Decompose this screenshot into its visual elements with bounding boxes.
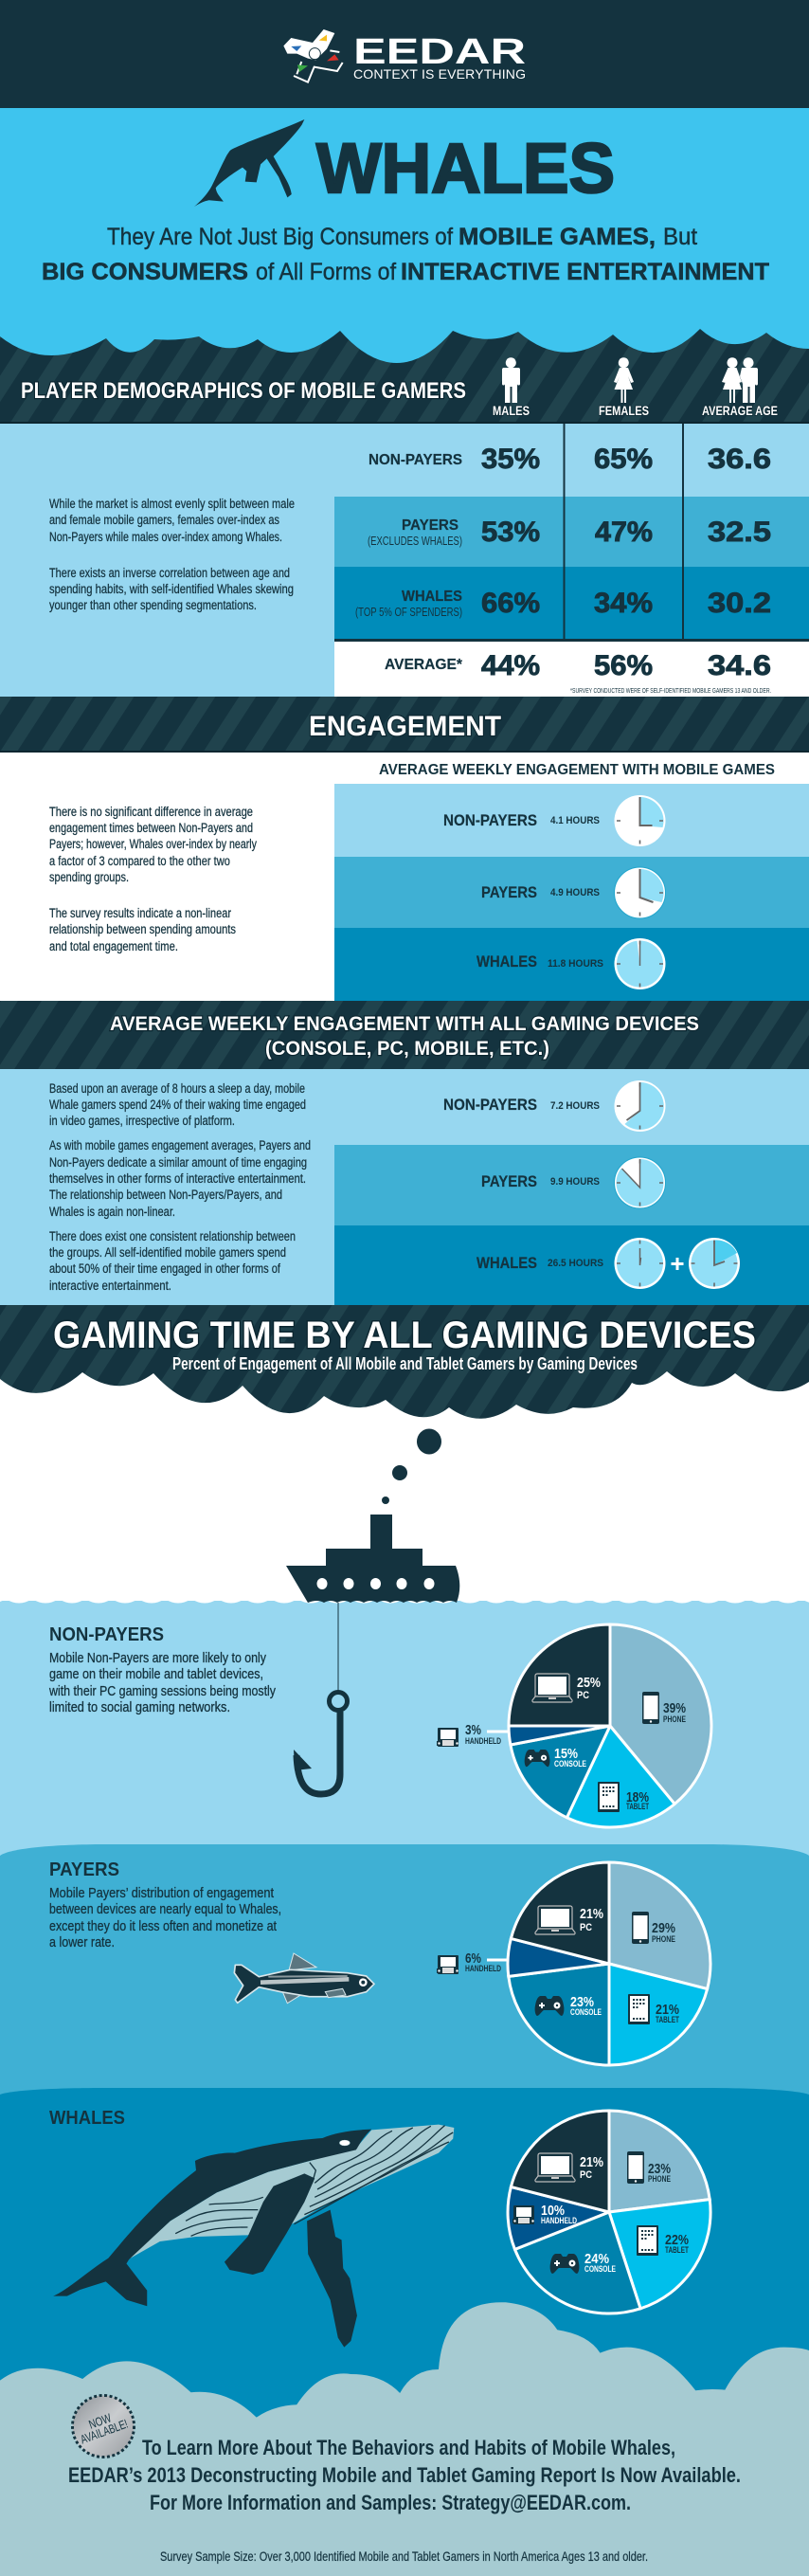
call to action text: To Learn More About The Behaviors and Habits of Mobile Whales, [142,2436,675,2459]
subtitle: of All Forms of [256,259,396,285]
subtitle: They Are Not Just Big Consumers of [107,224,453,250]
clock: 4.9 hours [614,867,665,918]
hero panel [0,108,809,383]
engagement text: a factor of 3 compared to the other two [49,854,230,868]
slice: tablet 22%: 22% [665,2232,689,2248]
slice: handheld 10%: 10% [541,2203,565,2219]
text block: themselves in other forms of interactive entertainment. [49,1171,306,1186]
slice: console 24%: CONSOLE [584,2264,616,2275]
icon: smoke bubbles [382,1429,441,1504]
text block: Mobile Payers’ distribution of engagement [49,1885,275,1901]
badge: now available: NOW [87,2410,114,2432]
icon: ship [286,1515,459,1603]
slice: handheld 3%: HANDHELD [465,1736,501,1747]
slice: phone 23%: PHONE [648,2174,671,2185]
slice: console 15% [525,1746,586,1769]
icon: fish [234,1953,374,2004]
row labels: WHALES [476,952,537,971]
text block: Whales is again non-linear. [49,1205,175,1219]
slice: PC 25%: PC [577,1690,589,1701]
slice: phone 29% [632,1912,675,1945]
water [0,2088,809,2502]
text block: limited to social gaming networks. [49,1699,230,1715]
panel: gaming time by device [0,1305,809,1419]
engagement text [49,805,257,953]
slice: tablet 21% [628,1994,679,2025]
text block: Mobile Non-Payers are more likely to only [49,1650,266,1666]
subtitle [42,224,769,285]
row labels: 11.8 HOURS [548,958,603,970]
demographics header band with wave top [0,329,809,423]
row labels: 4.1 HOURS [550,815,600,826]
panel: engagement [0,697,809,1001]
engagement band [0,697,809,752]
icon: fishing hook [294,1603,347,1794]
slice: tablet 18%: TABLET [626,1802,649,1812]
subtitle: MOBILE GAMES, [458,224,656,250]
panel: non-payers ocean [0,1429,809,1857]
panel rows [0,1069,809,1305]
badge: now available [72,2396,135,2457]
cloud [0,2302,809,2576]
subtitle: But [663,224,697,250]
header band [0,0,809,108]
slice: phone 23% [627,2151,671,2185]
slice: handheld 6% [437,1950,501,1974]
slice: PC 21% [535,2153,603,2182]
slice: phone 39%: PHONE [663,1714,686,1725]
title: WHALES [316,129,615,208]
panel: player demographics [0,329,809,697]
heading: WHALES [49,2108,125,2129]
heading: GAMING TIME BY ALL GAMING DEVICES [53,1315,756,1356]
slice: PC 25%: 25% [577,1675,601,1691]
slice: handheld 6%: HANDHELD [465,1964,501,1974]
column labels: AVERAGE AGE [702,403,778,418]
table backgrounds [0,424,809,697]
text block [48,1650,276,1715]
row: average: 34.6 [708,650,771,681]
row: payers: 47% [595,517,653,548]
row labels: PAYERS [481,883,537,901]
clock: 26.5 hours, second [689,1238,740,1289]
plus sign [671,1258,684,1270]
slice: handheld 3%: 3% [465,1722,481,1738]
row: non-payers: 65% [594,444,653,475]
row: average: 44% [481,650,540,681]
row labels: 7.2 HOURS [550,1100,600,1112]
row: whales: WHALES [402,589,462,605]
chart heading: AVERAGE WEEKLY ENGAGEMENT WITH MOBILE GAMES [379,762,775,778]
row: payers: PAYERS [402,517,458,534]
slice: tablet 22%: TABLET [665,2245,689,2256]
row labels: NON-PAYERS [443,1096,537,1114]
text block: a lower rate. [49,1934,115,1950]
row: non-payers: 36.6 [708,444,771,475]
clock: 7.2 hours [614,1080,665,1132]
band [0,1001,809,1069]
water [0,1601,809,1857]
EEDAR logo: CONTEXT IS EVERYTHING [353,66,526,82]
EEDAR logo [283,29,526,82]
demographics text: Non-Payers while males over-index among Whales. [49,530,282,544]
row: whales: 34% [594,588,653,619]
icon: humpback whale [53,2125,454,2348]
slice: handheld 3% [437,1722,501,1747]
slice: console 24%: 24% [584,2251,609,2267]
row: non-payers [369,444,771,475]
icon: female [614,357,634,403]
badge: now available: AVAILABLE! [79,2417,130,2446]
engagement text: The survey results indicate a non-linear [49,906,231,920]
slice: console 23%: CONSOLE [570,2007,602,2018]
heading: PAYERS [49,1859,119,1880]
text block: interactive entertainment. [49,1279,171,1293]
text block: except they do it less often and monetize at [49,1918,278,1934]
row labels [443,811,603,971]
row labels: 26.5 HOURS [548,1258,603,1269]
row labels: WHALES [476,1254,537,1272]
slice: console 15%: CONSOLE [554,1759,586,1769]
row labels: NON-PAYERS [443,811,537,829]
slice: tablet 18%: 18% [626,1789,649,1805]
engagement text: engagement times between Non-Payers and [49,821,253,835]
row labels: PAYERS [481,1172,537,1190]
text block: The relationship between Non-Payers/Payers, and [49,1188,282,1202]
slice: PC 21% [535,1906,603,1934]
engagement text: spending groups. [49,870,129,884]
demographics text: spending habits, with self-identified Whales skewing [49,582,294,596]
pie chart: non-payers [437,1624,711,1827]
demographics text [49,497,295,612]
icon: whale silhouette [194,119,304,207]
heading [110,1013,699,1060]
slice: PC 21%: 21% [580,2154,603,2170]
row: average: AVERAGE* [385,657,463,673]
row: payers [368,517,771,548]
clock: 26.5 hours, first [614,1238,665,1289]
text block: There does exist one consistent relationship between [49,1229,296,1243]
slice: console 23%: 23% [570,1994,594,2010]
row: payers: (EXCLUDES WHALES) [368,534,462,548]
panel: whales ocean [0,2088,809,2576]
column labels: FEMALES [599,403,649,418]
panel: all gaming devices [0,1001,809,1305]
row labels: 4.9 HOURS [550,887,600,898]
row: non-payers: 35% [481,444,540,475]
panel: payers ocean [0,1844,809,2099]
row: whales [355,588,771,619]
row: non-payers: NON-PAYERS [369,452,462,468]
heading: NON-PAYERS [49,1624,164,1645]
row: whales: 66% [481,588,540,619]
row: whales: (TOP 5% OF SPENDERS) [355,605,462,619]
row: payers: 32.5 [708,517,771,548]
slice: phone 39%: 39% [663,1700,686,1716]
slice: handheld 10% [512,2203,577,2226]
engagement text: relationship between spending amounts [49,922,236,936]
subheading: Percent of Engagement of All Mobile and Tablet Gamers by Gaming Devices [172,1354,638,1373]
clock: 9.9 hours [614,1157,665,1208]
text block: the groups. All self-identified mobile gamers spend [49,1245,286,1260]
engagement text: There is no significant difference in average [49,805,253,819]
demographics text: younger than other spending segmentations. [49,598,257,612]
slice: tablet 21%: 21% [656,2002,679,2018]
clock: 4.1 hours [614,795,665,846]
slice: phone 29%: 29% [652,1920,675,1936]
text block: between devices are nearly equal to Whales, [49,1901,281,1917]
slice: phone 39% [642,1692,686,1725]
slice: console 23% [535,1994,602,2018]
pie chart: whales [508,2111,710,2313]
text block [49,1081,311,1293]
slice: PC 21%: PC [580,2169,592,2181]
EEDAR logo: EEDAR [353,32,526,72]
column labels [493,403,778,418]
slice: console 24% [550,2251,616,2275]
slice: handheld 6%: 6% [465,1950,481,1967]
text block: As with mobile games engagement averages, Payers and [49,1138,311,1152]
text block: game on their mobile and tablet devices, [49,1666,263,1682]
water [0,1844,809,2099]
slice: PC 25% [532,1674,601,1702]
slice: phone 23%: 23% [648,2161,671,2177]
call to action text [68,2436,741,2514]
engagement text: Payers; however, Whales over-index by nearly [49,837,257,851]
row: whales: 30.2 [708,588,771,619]
text block: Whale gamers spend 24% of their waking time engaged [49,1098,306,1112]
clock: 11.8 hours [614,938,665,989]
row: average [385,650,771,681]
text block: Non-Payers dedicate a similar amount of time engaging [49,1155,307,1170]
slice: phone 29%: PHONE [652,1934,675,1945]
pie chart: payers [437,1862,710,2065]
slice: PC 21%: PC [580,1922,592,1933]
slice: tablet 18% [598,1782,649,1812]
demographics text: and female mobile gamers, females over-index as [49,513,279,527]
column labels: MALES [493,403,530,418]
text block: in video games, irrespective of platform. [49,1114,235,1128]
row labels: 9.9 HOURS [550,1176,600,1188]
white panel and rows [0,753,809,1001]
icon: male [502,357,520,403]
row: average: 56% [594,650,653,681]
row: payers: 53% [481,517,540,548]
heading: AVERAGE WEEKLY ENGAGEMENT WITH ALL GAMING DEVICES [110,1013,699,1035]
cloud band [0,1305,809,1419]
slice: handheld 10%: HANDHELD [541,2216,577,2226]
logo icon: gamepad cross [283,29,343,82]
survey note: Survey Sample Size: Over 3,000 Identified Mobile and Tablet Gamers in North America Ages 13 and older. [160,2549,648,2564]
subtitle: INTERACTIVE ENTERTAINMENT [401,259,769,285]
text block [49,1885,281,1950]
row labels [443,1096,603,1272]
text block: with their PC gaming sessions being mostly [48,1683,276,1699]
demographics text: There exists an inverse correlation between age and [49,566,290,580]
heading: PLAYER DEMOGRAPHICS OF MOBILE GAMERS [21,378,466,404]
engagement text: and total engagement time. [49,939,178,953]
heading: (CONSOLE, PC, MOBILE, ETC.) [265,1038,549,1060]
slice: PC 21%: 21% [580,1906,603,1922]
call to action text: For More Information and Samples: Strategy@EEDAR.com. [150,2491,631,2514]
subtitle: BIG CONSUMERS [42,259,248,285]
text block: Based upon an average of 8 hours a sleep a day, mobile [49,1081,305,1096]
heading: ENGAGEMENT [309,711,501,742]
demographics text: While the market is almost evenly split between male [49,497,295,511]
icon: couple [722,357,758,403]
slice: tablet 21%: TABLET [656,2015,679,2025]
slice: console 15%: 15% [554,1746,578,1762]
slice: tablet 22% [637,2225,689,2256]
text block: about 50% of their time engaged in other forms of [49,1261,280,1276]
